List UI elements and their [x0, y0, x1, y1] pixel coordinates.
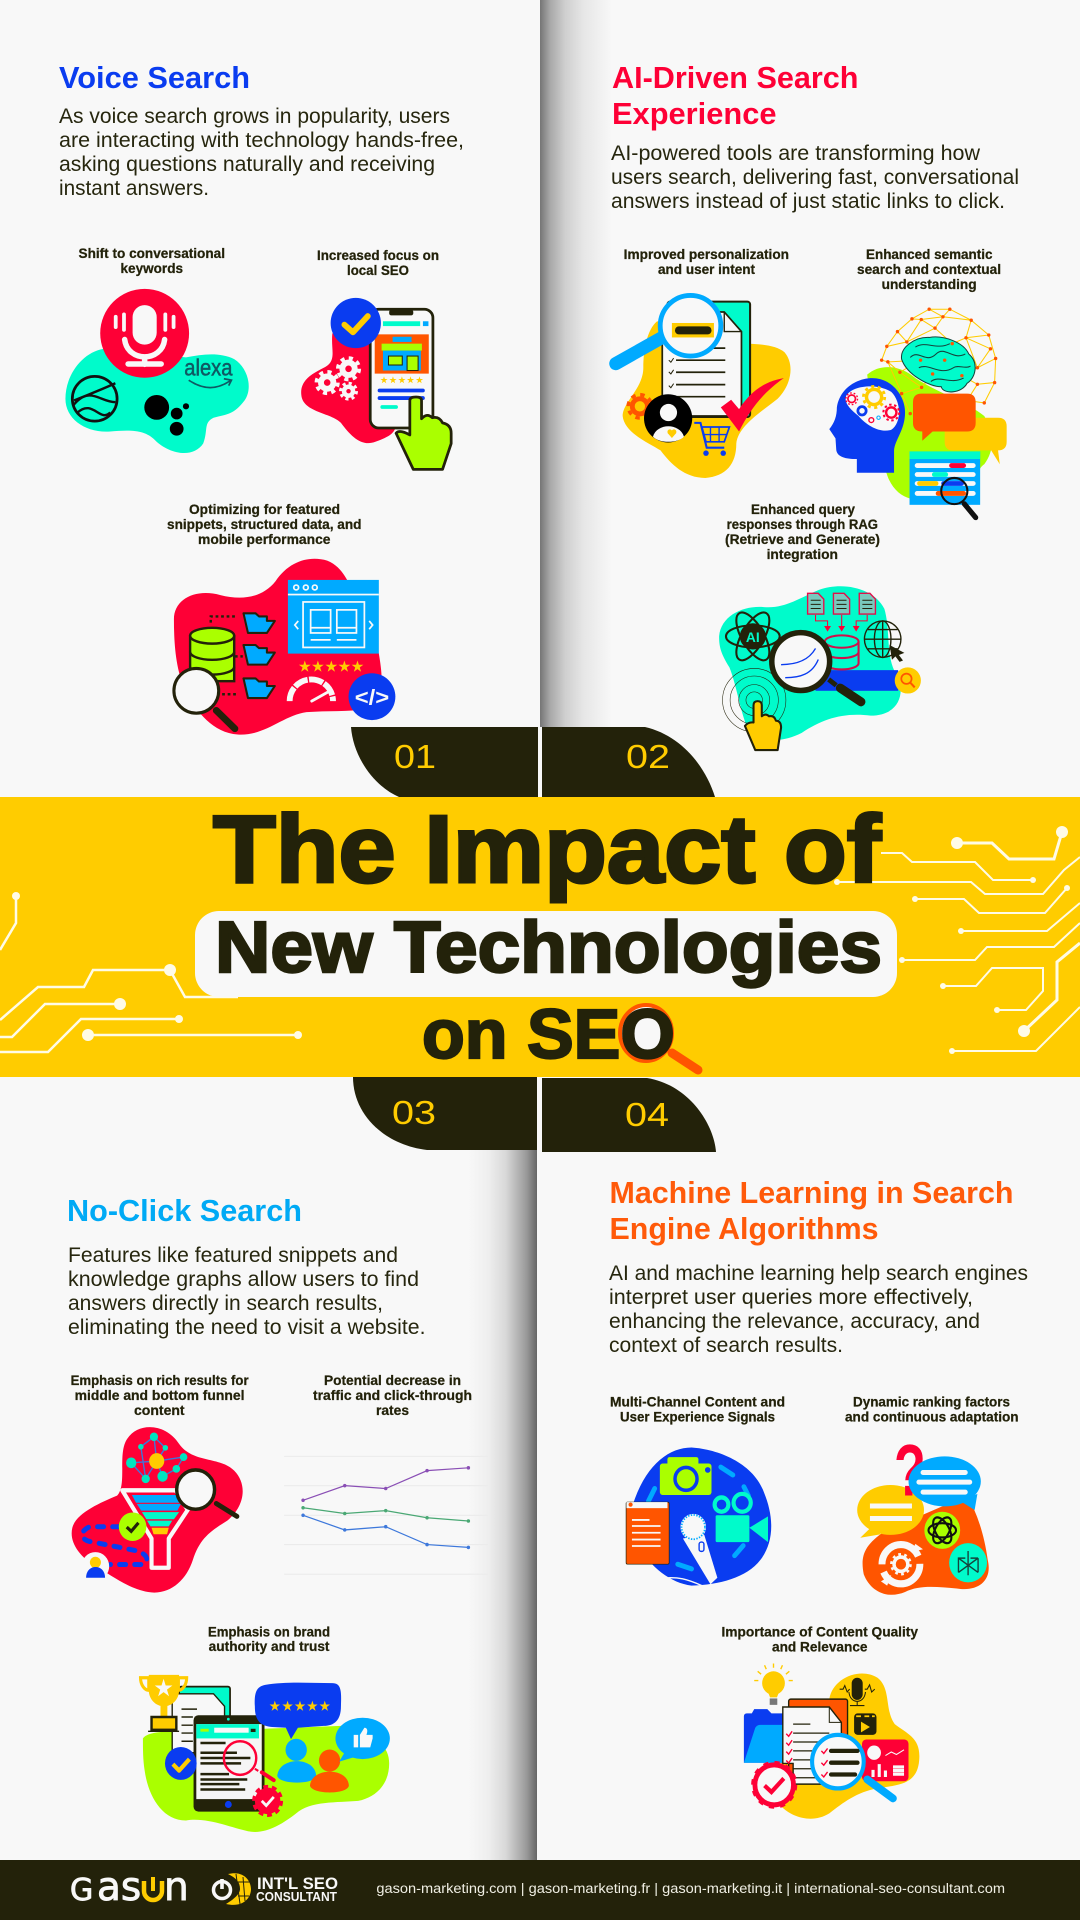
tab: 03: 03 [392, 1094, 436, 1131]
label: rich results: Emphasis on rich results for [71, 1373, 249, 1388]
heading: AI-driven search: Experience [612, 96, 776, 131]
label: conversational keywords [78, 246, 225, 276]
heading: machine learning: Engine Algorithms [610, 1211, 878, 1246]
title banner [0, 796, 1080, 1077]
label: semantic search: search and contextual [857, 262, 1001, 277]
circuit lines: left [0, 892, 302, 1052]
body text: no-click search: Features like featured snippets and [68, 1244, 398, 1267]
heading: voice search: Voice Search [59, 60, 250, 95]
logo: international SEO consultant: CONSULTANT [256, 1890, 337, 1904]
label: multi-channel content: Multi-Channel Content and [610, 1394, 785, 1409]
icon: personalization document [616, 295, 791, 478]
body text: machine learning: context of search results. [609, 1334, 843, 1357]
heading: AI-driven search: AI-Driven Search [612, 60, 858, 95]
body text: machine learning: enhancing the relevance, accuracy, and [609, 1310, 980, 1333]
icon: content quality [744, 1663, 919, 1819]
label: multi-channel content [610, 1394, 785, 1424]
tab: 01 [351, 727, 538, 797]
label: rich results [71, 1373, 249, 1418]
heading: machine learning: Machine Learning in Search [610, 1175, 1014, 1210]
logo: Gason: n [164, 1865, 189, 1910]
label: local SEO: local SEO [347, 263, 409, 278]
logo: Gason: as [97, 1865, 141, 1910]
footer websites: gason-marketing.com | gason-marketing.fr | gason-marketing.it | international-seo-consultant.com [376, 1881, 1005, 1896]
label: local SEO: Increased focus on [317, 248, 439, 263]
panel: AI-driven search experience [611, 60, 1019, 750]
title line: The Impact of: The Impact of [213, 796, 882, 903]
label: dynamic ranking: and continuous adaptation [845, 1409, 1019, 1424]
label: traffic decrease [313, 1373, 472, 1418]
body text: AI-driven search: AI-powered tools are transforming how [611, 142, 981, 165]
body text: voice search: instant answers. [59, 177, 209, 200]
label: personalization: and user intent [658, 262, 756, 277]
heading: AI-driven search [612, 60, 858, 131]
label: brand authority: Emphasis on brand [208, 1624, 330, 1640]
body text: voice search: As voice search grows in popularity, users [59, 105, 450, 128]
logo: international SEO consultant: INT'L SEO [257, 1875, 338, 1893]
tab: 03 [353, 1077, 537, 1150]
label: traffic decrease: Potential decrease in [324, 1373, 461, 1388]
label: brand authority [208, 1624, 330, 1654]
heading: no-click search: No-Click Search [67, 1193, 302, 1228]
label: content quality: and Relevance [772, 1640, 868, 1654]
label: RAG integration: integration [767, 547, 838, 562]
logo: international SEO consultant [214, 1873, 338, 1905]
label: rich results: middle and bottom funnel [75, 1388, 244, 1403]
logo: Gason [70, 1865, 189, 1910]
logo: Gason: G [70, 1873, 93, 1908]
tab: 01: 01 [394, 738, 436, 775]
circuit lines: right [834, 826, 1080, 1054]
label: semantic search: understanding [882, 277, 977, 292]
icon: voice assistants [65, 289, 249, 453]
label: brand authority: authority and trust [209, 1639, 330, 1654]
tab: 02 [542, 727, 715, 797]
icon: voice assistants: alexa [184, 354, 233, 380]
icon: local SEO phone [301, 298, 451, 469]
icon: semantic brain network [829, 307, 1007, 518]
label: RAG integration: responses through RAG [727, 517, 878, 532]
label: conversational keywords: keywords [120, 261, 183, 276]
tab: 02: 02 [626, 738, 670, 775]
label: semantic search [857, 247, 1001, 292]
label: traffic decrease: traffic and click-through [313, 1388, 472, 1403]
label: personalization [624, 247, 789, 277]
label: personalization: Improved personalization [624, 247, 789, 262]
icon: structured data and performance: </> [355, 686, 389, 710]
body text: machine learning [609, 1262, 1028, 1357]
icon: RAG search: AI [746, 630, 760, 645]
label: RAG integration: (Retrieve and Generate) [725, 532, 880, 547]
label: featured snippets [167, 502, 362, 547]
label: rich results: content [134, 1403, 185, 1418]
label: traffic decrease: rates [376, 1403, 409, 1418]
label: local SEO [317, 248, 439, 278]
icon: dynamic ranking bubbles [857, 1431, 989, 1595]
panel: no-click search [67, 1193, 488, 1832]
tab: 04: 04 [625, 1096, 669, 1133]
title pill: New Technologies: New Technologies [215, 908, 882, 988]
line chart: traffic decrease [284, 1456, 488, 1574]
body text: AI-driven search [611, 142, 1019, 213]
panel: machine learning [609, 1175, 1028, 1819]
body text: machine learning: interpret user queries more effectively, [609, 1286, 973, 1309]
icon: dynamic ranking bubbles: ? [894, 1431, 926, 1512]
label: content quality [722, 1624, 918, 1654]
label: multi-channel content: User Experience Signals [620, 1409, 775, 1424]
body text: voice search: asking questions naturally and receiving [59, 153, 435, 176]
label: RAG integration: Enhanced query [751, 502, 855, 517]
label: featured snippets: Optimizing for featured [189, 502, 340, 517]
title line: on SEO with magnifier: on SEO [422, 995, 675, 1073]
footer bar [0, 1860, 1080, 1920]
label: dynamic ranking [845, 1394, 1019, 1424]
label: featured snippets: snippets, structured data, and [167, 517, 362, 532]
body text: AI-driven search: answers instead of just static links to click. [611, 190, 1005, 213]
tab: 04 [542, 1078, 716, 1152]
icon: RAG search [719, 586, 921, 750]
label: semantic search: Enhanced semantic [866, 247, 993, 262]
body text: no-click search: eliminating the need to visit a website. [68, 1316, 426, 1339]
heading: machine learning [610, 1175, 1014, 1246]
icon: funnel [72, 1427, 243, 1593]
label: dynamic ranking: Dynamic ranking factors [853, 1394, 1010, 1409]
icon: brand trust [141, 1675, 390, 1832]
body text: no-click search: knowledge graphs allow users to find [68, 1268, 419, 1291]
panel: voice search [59, 60, 464, 735]
label: RAG integration [725, 502, 880, 562]
label: content quality: Importance of Content Quality [722, 1624, 918, 1640]
label: conversational keywords: Shift to conversational [78, 246, 225, 261]
icon: multi-channel media [626, 1447, 771, 1586]
body text: machine learning: AI and machine learning help search engines [609, 1262, 1028, 1285]
icon: structured data and performance [174, 559, 395, 735]
body text: voice search: are interacting with technology hands-free, [59, 129, 464, 152]
label: featured snippets: mobile performance [198, 532, 331, 547]
body text: no-click search [68, 1244, 426, 1339]
body text: no-click search: answers directly in search results, [68, 1292, 383, 1315]
body text: AI-driven search: users search, delivering fast, conversational [611, 166, 1019, 189]
body text: voice search [59, 105, 464, 200]
